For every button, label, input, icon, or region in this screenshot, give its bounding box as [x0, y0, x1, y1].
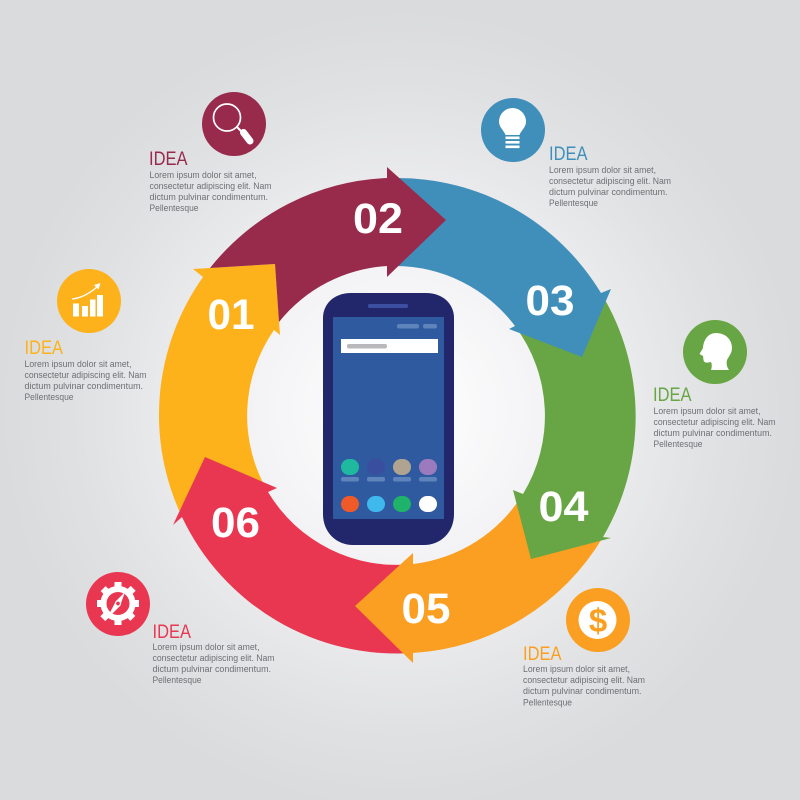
body text: Pellentesque: [549, 198, 598, 209]
body text: consectetur adipiscing elit. Nam: [24, 370, 146, 381]
body text: consectetur adipiscing elit. Nam: [654, 417, 776, 428]
body text: [549, 165, 671, 209]
status bars: [397, 324, 437, 328]
panel: idea 01 yellow: [24, 269, 146, 403]
phone body: [323, 293, 454, 545]
body text: Lorem ipsum dolor sit amet,: [150, 170, 256, 181]
number 03: 03: [526, 277, 574, 325]
body text: [24, 359, 146, 403]
number 04: 04: [538, 483, 589, 531]
body text: dictum pulvinar condimentum.: [152, 664, 271, 675]
body text: consectetur adipiscing elit. Nam: [152, 653, 274, 664]
body text: Pellentesque: [152, 675, 202, 686]
body text: dictum pulvinar condimentum.: [523, 686, 642, 697]
body text: dictum pulvinar condimentum.: [150, 192, 268, 203]
body text: [150, 170, 272, 214]
arrow 06 red: [173, 457, 413, 654]
arrow 05 orange: [355, 494, 603, 663]
step numbers: [208, 195, 589, 633]
body text: Lorem ipsum dolor sit amet,: [152, 642, 260, 653]
body text: Lorem ipsum dolor sit amet,: [549, 165, 656, 176]
body text: consectetur adipiscing elit. Nam: [150, 181, 272, 192]
heading: IDEA: [24, 338, 63, 359]
search bar: [341, 339, 438, 353]
circular arrow cycle: [159, 167, 636, 663]
body text: dictum pulvinar condimentum.: [24, 381, 143, 392]
body text: consectetur adipiscing elit. Nam: [549, 176, 671, 187]
arrow 02 maroon: [210, 167, 446, 322]
panel: idea 06 red: [86, 572, 274, 686]
number 01: 01: [208, 291, 254, 339]
body text: Lorem ipsum dolor sit amet,: [24, 359, 132, 370]
arrow 01 yellow: [159, 264, 280, 517]
icon: gear compass: [86, 572, 150, 636]
body text: [654, 406, 776, 450]
icon: dollar coin: $: [589, 602, 607, 639]
number 02: 02: [353, 195, 403, 243]
body text: consectetur adipiscing elit. Nam: [523, 675, 645, 686]
panel: idea 04 green: [653, 320, 776, 450]
icon: head silhouette: [683, 320, 747, 384]
icon: growth chart: [57, 269, 121, 333]
app icons bottom row: [341, 496, 437, 512]
body text: [523, 664, 645, 708]
body text: [152, 642, 274, 686]
icon: light bulb: [481, 98, 545, 162]
phone speaker: [368, 304, 408, 308]
panel: idea 03 blue: [481, 98, 671, 209]
body text: dictum pulvinar condimentum.: [549, 187, 668, 198]
body text: Pellentesque: [523, 698, 572, 708]
body text: dictum pulvinar condimentum.: [654, 428, 772, 439]
heading: IDEA: [653, 385, 692, 406]
heading: IDEA: [523, 644, 562, 665]
app icons top row: [341, 459, 437, 482]
panel: idea 02 maroon: [149, 92, 272, 214]
smartphone: [323, 293, 454, 545]
icon: magnifier: [202, 92, 266, 156]
number 05: 05: [402, 585, 450, 633]
heading: IDEA: [149, 149, 188, 170]
body text: Pellentesque: [24, 392, 74, 403]
body text: Lorem ipsum dolor sit amet,: [654, 406, 760, 417]
number 06: 06: [211, 499, 260, 547]
arrow 04 green: [513, 293, 636, 559]
phone screen: [333, 317, 444, 519]
arrow 03 blue: [395, 178, 611, 357]
heading: IDEA: [152, 622, 191, 643]
body text: Pellentesque: [654, 439, 702, 450]
heading: IDEA: [549, 144, 588, 165]
body text: Lorem ipsum dolor sit amet,: [523, 664, 630, 675]
panel: idea 05 orange: [523, 588, 645, 708]
body text: Pellentesque: [150, 203, 198, 214]
